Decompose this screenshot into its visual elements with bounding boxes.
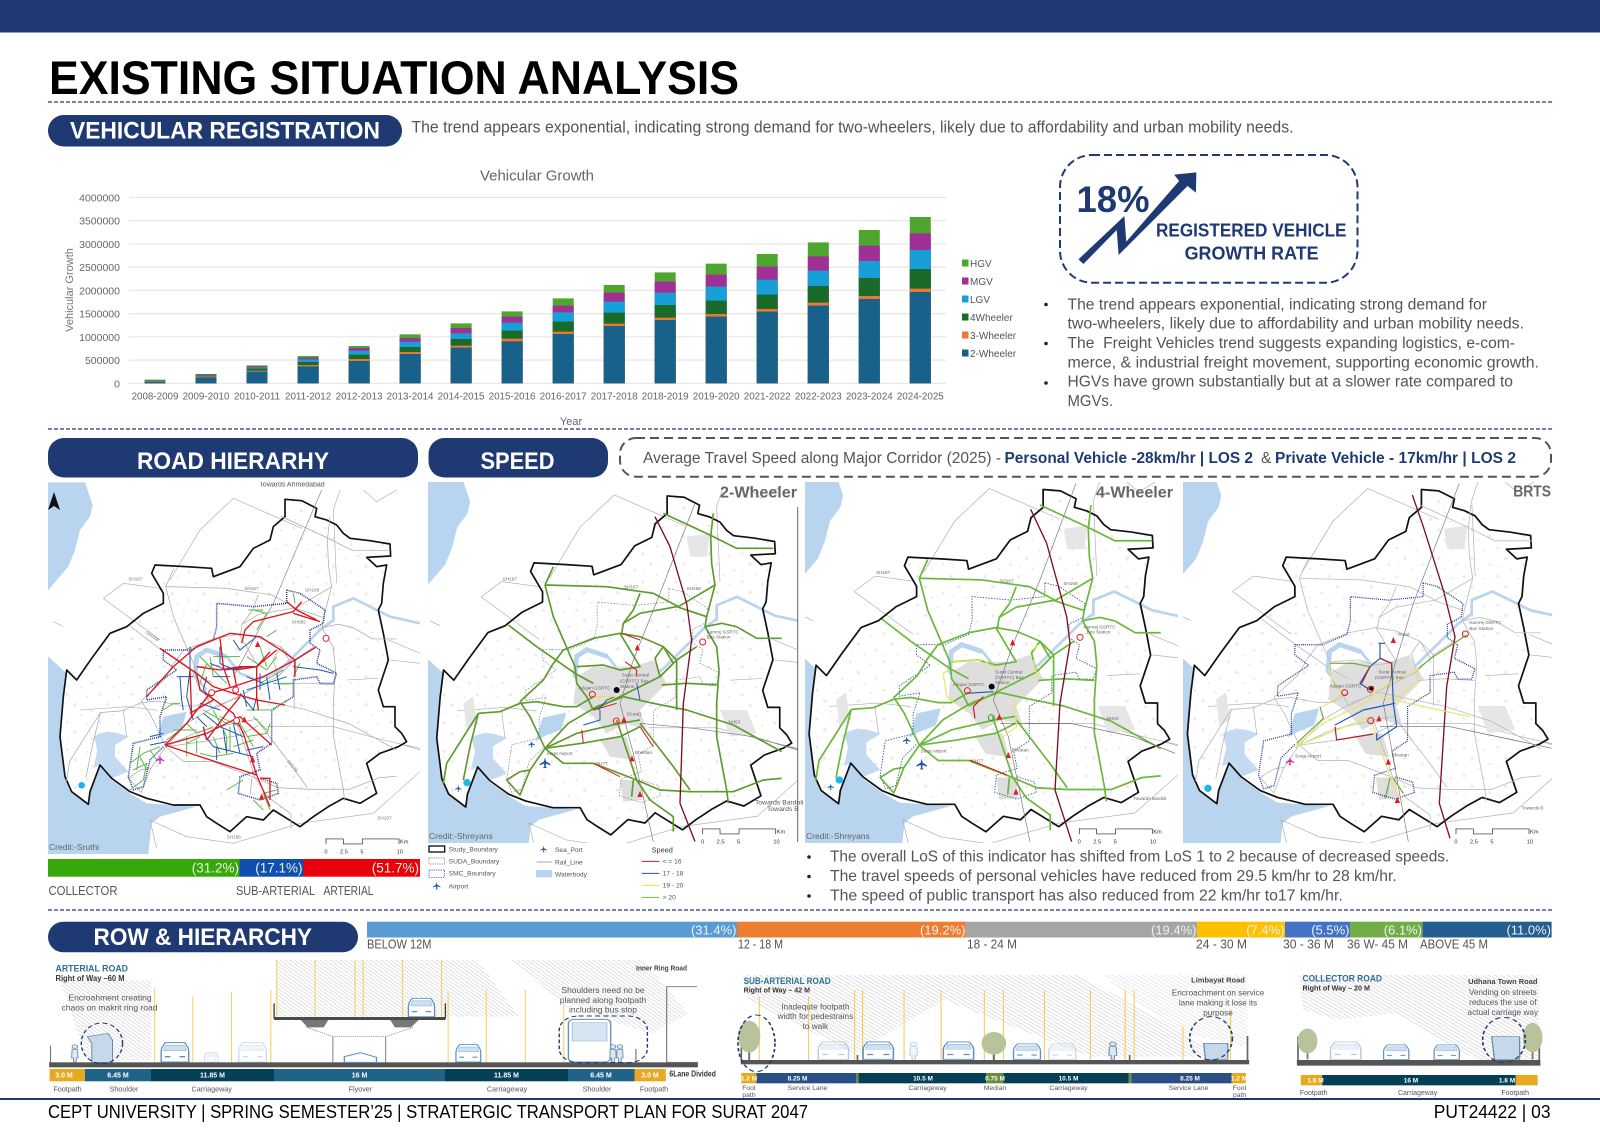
x axis labels: 2016-2017 — [540, 392, 587, 403]
bar: right of way shares: (19.2%) — [920, 922, 966, 938]
scale bar — [701, 828, 785, 846]
bar labels: right of way widths — [367, 938, 1488, 952]
bullet list: vehicle trends: two-wheelers, likely due to affordability and urban mobility needs. — [1068, 316, 1524, 333]
station labels: Surat Airport — [1295, 753, 1322, 758]
road and station labels — [503, 577, 741, 766]
chart legend: LGV — [970, 295, 990, 306]
bar labels: road class: SUB-ARTERIAL — [236, 884, 315, 898]
width labels: path — [1233, 1092, 1246, 1099]
width bar — [1301, 1075, 1538, 1085]
top banner — [0, 0, 1600, 32]
map label: 2-wheeler: 2-Wheeler — [720, 485, 797, 502]
road and station labels: SH77 — [972, 759, 984, 764]
credit: Credit:-Shreyans — [429, 831, 493, 841]
width labels: Carriageway — [192, 1085, 232, 1094]
road and station labels: Bhestan — [1012, 748, 1029, 753]
scale bar: 2.5 — [1470, 840, 1478, 846]
scale bar: 10 — [1527, 840, 1533, 846]
width values: 10.5 M — [1059, 1076, 1078, 1082]
width values: 0.75 M — [985, 1076, 1005, 1082]
scale bar: 0 — [701, 840, 704, 846]
bar: right of way shares: (5.5%) — [1311, 922, 1350, 938]
x axis labels: 2015-2016 — [489, 392, 536, 403]
heading: speed: SPEED — [480, 448, 554, 475]
road and station labels: SH167 — [503, 577, 517, 582]
cross section: sub-arterial road — [738, 975, 1265, 1099]
scale bar: 0 — [1078, 840, 1081, 846]
map markers — [78, 635, 329, 800]
callout: 18% growth rate — [1060, 155, 1358, 283]
legend: map symbols: 19 - 20 — [663, 883, 684, 890]
chart legend: 4Wheeler — [970, 313, 1013, 324]
section titles: ARTERIAL ROAD — [56, 964, 128, 975]
right of way: Right of Way – 20 M — [1302, 984, 1370, 993]
bullet list: vehicle trends: The trend appears exponential, indicating strong demand for — [1068, 296, 1487, 313]
map label: BRTS: BRTS — [1513, 484, 1551, 501]
road and station labels: (GSRTC) Bus — [995, 675, 1024, 680]
x axis labels: 2010-2011 — [234, 392, 280, 403]
x axis labels: 2012-2013 — [336, 392, 383, 403]
width bar: 11.85 M — [494, 1072, 519, 1080]
chart legend: 3-Wheeler — [970, 331, 1017, 342]
y axis labels: 3500000 — [79, 216, 120, 228]
annotations: width for pedestrains — [777, 1012, 853, 1021]
scale bar: 10 — [1150, 840, 1156, 846]
map: 2-wheeler speed — [428, 482, 798, 843]
road and station labels: Bus Station — [1087, 629, 1111, 634]
road labels: SH176 — [286, 759, 299, 774]
width bar — [741, 1073, 1246, 1083]
station labels: Bus Station — [1469, 626, 1494, 631]
road and station labels: (GSRTC) Bus — [620, 678, 649, 683]
x axis labels: 2008-2009 — [132, 392, 178, 403]
section drawing — [1297, 975, 1542, 1085]
station labels: (GSRTC) Bus — [1375, 675, 1404, 680]
heading: road hierarchy: ROAD HIERARHY — [137, 448, 329, 475]
callout: average travel speed: & — [1261, 450, 1272, 467]
y axis labels — [79, 192, 120, 390]
road labels: SH167 — [244, 586, 259, 591]
scale bar: 0 — [1454, 840, 1457, 846]
legend: map symbols: Speed — [652, 846, 673, 855]
y axis labels: 0 — [114, 378, 120, 390]
annotations — [777, 989, 1265, 1031]
scale bar: Km — [1153, 830, 1162, 836]
width values: 1.8 M — [1307, 1078, 1324, 1084]
y axis labels: 500000 — [85, 355, 120, 367]
x axis labels — [132, 392, 944, 403]
callout: average travel speed: Private Vehicle - 17km/hr | LOS 2 — [1275, 450, 1516, 467]
legend: map symbols: Airport — [449, 883, 468, 890]
road name: Inner Ring Road — [636, 964, 687, 973]
width values — [1307, 1078, 1515, 1084]
bar labels: right of way widths: 24 - 30 M — [1196, 938, 1247, 952]
bar labels: road class — [48, 884, 374, 898]
width labels: path — [742, 1092, 756, 1099]
bullet list: vehicle trends: MGVs. — [1068, 393, 1113, 410]
width labels: Shoulder — [583, 1085, 612, 1094]
road and station labels: Surat Airport — [547, 751, 573, 756]
annotations: to walk — [803, 1022, 829, 1031]
footer: course line: CEPT UNIVERSITY | SPRING SEMESTER’25 | STRATERGIC TRANSPORT PLAN FOR SURAT 2047 — [48, 1101, 808, 1122]
section drawing — [49, 960, 698, 1067]
station labels: Road — [1398, 632, 1410, 637]
width labels: Carriageway — [1398, 1090, 1438, 1097]
road labels: SH186 — [227, 835, 241, 840]
y axis title: Vehicular Growth — [64, 248, 76, 332]
width values: 1.8 M — [1499, 1078, 1515, 1084]
bar: road hierarchy shares — [48, 859, 420, 877]
encroachment highlight — [1483, 1017, 1525, 1063]
annotations: Encroachment on service — [1172, 989, 1265, 998]
scale bar: 2.5 — [717, 840, 725, 846]
bullet list: speed findings: The travel speeds of personal vehicles have reduced from 29.5 km/hr to 28 km/hr. — [830, 868, 1397, 885]
map markers — [455, 639, 706, 797]
scale bar: 10 — [397, 850, 403, 856]
legend: map symbols: Sea_Port — [555, 847, 583, 854]
annotations — [62, 985, 647, 1015]
bar labels: right of way widths: 30 - 36 M — [1283, 938, 1334, 952]
road and station labels: Bhestan — [635, 750, 652, 755]
destination labels — [755, 800, 804, 813]
callout: average travel speed — [620, 438, 1551, 477]
icon: north arrow — [48, 492, 60, 510]
road and station labels: SH167 — [624, 584, 639, 589]
annotations: Shoulders need no be — [561, 985, 645, 995]
bar: road hierarchy shares: (51.7%) — [372, 860, 419, 876]
annotations — [1468, 988, 1539, 1017]
width values: 10.5 M — [913, 1076, 933, 1082]
bar: right of way shares — [367, 922, 1552, 938]
width bar: 6.45 M — [590, 1072, 612, 1080]
width values: 1.2 M — [741, 1076, 757, 1082]
legend: map symbols: Study_Boundary — [449, 847, 499, 854]
y axis labels: 2500000 — [79, 262, 120, 274]
x axis labels: 2014-2015 — [438, 392, 485, 403]
annotations: chaos on makrit ring road — [62, 1002, 158, 1012]
x axis labels: 2011-2012 — [285, 392, 331, 403]
bullet list: speed findings: The speed of public transport has also reduced from 22 km/hr to17 km/hr. — [830, 887, 1343, 904]
chart legend: MGV — [970, 277, 993, 288]
y axis labels: 4000000 — [79, 192, 120, 204]
width labels: Carriageway — [487, 1085, 528, 1094]
station labels: Surat Central — [1378, 669, 1406, 674]
annotations: reduces the use of — [1469, 998, 1537, 1007]
width values: 1.2 M — [1231, 1076, 1247, 1082]
x axis labels: 2024-2025 — [897, 392, 944, 403]
station labels: Kamrej GSRTC — [1469, 620, 1502, 625]
road and station labels: Surat Airport — [921, 748, 947, 753]
scale bar: 5 — [737, 840, 740, 846]
scale bar: 5 — [1490, 840, 1493, 846]
icon: rising arrow — [1078, 172, 1196, 264]
map markers — [1204, 631, 1468, 803]
width labels: Flyover — [349, 1085, 373, 1094]
road and station labels: SH77 — [596, 761, 608, 766]
heading: road hierarchy — [48, 438, 418, 478]
annotations: actual carriage way — [1468, 1008, 1539, 1017]
road labels: SH168 — [305, 588, 320, 593]
bar labels: right of way widths: 12 - 18 M — [738, 938, 783, 952]
road labels: SH602 — [292, 619, 306, 624]
scale bar: 10 — [773, 840, 780, 846]
right of way: Right of Way –60 M — [56, 974, 125, 983]
road and station labels: Kamrej GSRTC — [707, 629, 740, 634]
road and station labels: Station — [995, 680, 1010, 685]
width labels: Foot — [742, 1085, 756, 1092]
legend: map symbols: Rail_Line — [555, 859, 583, 866]
width bar: 6.45 M — [107, 1072, 129, 1080]
road and station labels: Adajan GSRTC — [953, 682, 985, 687]
scale bar: Km — [400, 840, 409, 846]
bar: right of way shares: (19.4%) — [1151, 922, 1196, 938]
heading: vehicular registration: VEHICULAR REGISTRATION — [70, 118, 380, 144]
section drawing — [738, 975, 1249, 1083]
road labels: SH168 — [145, 630, 160, 643]
annotations: Encroahment creating — [68, 992, 152, 1002]
width bar — [50, 1069, 666, 1081]
width labels: Carriageway — [909, 1085, 947, 1092]
encroachment highlights — [738, 1015, 1232, 1072]
destination labels: Towards B — [767, 806, 799, 813]
width bar: 16 M — [352, 1072, 367, 1080]
legend: map symbols: SUDA_Boundary — [449, 859, 500, 866]
road and station labels: Towards Bardoli — [1133, 796, 1166, 801]
x axis labels: 2017-2018 — [591, 392, 638, 403]
legend: map symbols: < = 16 — [663, 859, 682, 866]
width values: 8.25 M — [1180, 1076, 1200, 1082]
bar chart: vehicular growth — [64, 168, 1017, 428]
bar labels: right of way widths: 36 W- 45 M — [1347, 938, 1408, 952]
road and station labels: Adajan GSRTC — [578, 685, 611, 690]
road labels: SH107 — [377, 815, 392, 820]
bar labels: right of way widths: 18 - 24 M — [967, 938, 1017, 952]
annotations: planned along footpath — [560, 995, 647, 1005]
road and station labels — [876, 570, 1166, 801]
road and station labels: Surat Central — [995, 669, 1022, 674]
width bar: 11.85 M — [200, 1072, 225, 1080]
chart legend — [962, 259, 1017, 360]
road name: Udhana Town Road — [1468, 977, 1538, 986]
map: 4-wheeler speed — [805, 482, 1178, 843]
annotations: lane making it lose its — [1179, 998, 1257, 1007]
road and station labels: Kamrej GSRTC — [1083, 624, 1116, 629]
bar labels: right of way widths: BELOW 12M — [367, 938, 432, 952]
x axis labels: 2018-2019 — [642, 392, 689, 403]
bar labels: road class: ARTERIAL — [324, 884, 374, 898]
road and station labels: NH53 — [728, 719, 741, 724]
width values: 16 M — [1404, 1078, 1418, 1084]
bullet list: vehicle trends: merce, & industrial freight movement, supporting economic growth. — [1068, 355, 1539, 372]
road labels — [128, 577, 392, 840]
heading: row and hierarchy — [48, 922, 358, 952]
bullet list: speed findings: The overall LoS of this indicator has shifted from LoS 1 to 2 because of decreased speeds. — [830, 849, 1449, 866]
bar: road hierarchy shares: (31.2%) — [192, 860, 239, 876]
cross section: arterial road — [49, 960, 716, 1094]
station labels — [1295, 620, 1543, 810]
bar: right of way shares: (31.4%) — [691, 922, 736, 938]
x axis labels: 2013-2014 — [387, 392, 434, 403]
road and station labels: Station — [620, 684, 635, 689]
width labels: Service Lane — [1169, 1085, 1209, 1092]
station labels: Towards B — [1522, 805, 1543, 810]
width labels: Shoulder — [110, 1085, 139, 1094]
bullet list: vehicle trends: HGVs have grown substantially but at a slower rate compared to — [1068, 374, 1513, 391]
scale bar: 2.5 — [340, 850, 348, 856]
road and station labels: SH168 — [1063, 581, 1078, 586]
bullet list: vehicle trends — [1044, 296, 1539, 410]
legend: map symbols: Waterbody — [555, 872, 588, 879]
scale bar: 5 — [1114, 840, 1117, 846]
stat caption: GROWTH RATE — [1185, 242, 1319, 263]
station labels: Bhestan — [1392, 753, 1409, 758]
width bar: 3.0 M — [55, 1072, 73, 1080]
footer: page code: PUT24422 | 03 — [1434, 1101, 1550, 1122]
callout: average travel speed: Average Travel Speed along Major Corridor (2025) - — [643, 450, 1001, 467]
credit: Credit:-Sruthi — [49, 842, 99, 852]
flyover — [274, 1003, 445, 1062]
width values: 8.25 M — [788, 1076, 807, 1082]
scale bar: 5 — [360, 850, 363, 856]
width labels — [742, 1085, 1247, 1099]
width labels: Footpath — [640, 1085, 668, 1094]
x axis title: Year — [560, 416, 582, 428]
road and station labels: SH167 — [876, 570, 891, 575]
width labels: Foot — [1233, 1085, 1247, 1092]
road and station labels: (Surat) — [627, 712, 641, 717]
scale bar: Km — [1530, 830, 1539, 836]
bar labels: road class: COLLECTOR — [48, 884, 118, 898]
lane note: 6Lane Divided — [669, 1070, 716, 1079]
width labels: Median — [984, 1085, 1006, 1092]
right of way: Right of Way – 42 M — [744, 986, 810, 995]
scale bar: Km — [777, 830, 785, 836]
y axis labels: 1500000 — [79, 309, 120, 321]
section title: COLLECTOR ROAD — [1302, 974, 1382, 985]
width labels: Footpath — [1501, 1090, 1529, 1097]
scale bar — [324, 838, 408, 854]
footer rule — [0, 1098, 1600, 1100]
width labels — [1300, 1090, 1529, 1097]
heading: row and hierarchy: ROW & HIERARCHY — [94, 924, 312, 951]
x axis labels: 2021-2022 — [744, 392, 791, 403]
width labels: Footpath — [1300, 1090, 1328, 1097]
map: BRTS speed — [1183, 482, 1552, 843]
annotations: Inadequte footpath — [781, 1002, 850, 1011]
stacked bars — [144, 217, 931, 383]
legend: map symbols: SMC_Boundary — [449, 871, 496, 878]
legend: map symbols: > 20 — [663, 895, 676, 902]
x axis labels: 2022-2023 — [795, 392, 842, 403]
annotations: purpose — [1203, 1008, 1233, 1017]
width values — [741, 1076, 1247, 1082]
heading: speed — [428, 438, 608, 478]
callout: average travel speed: Personal Vehicle -28km/hr | LOS 2 — [1004, 450, 1253, 467]
road labels: SH167 — [128, 577, 143, 582]
label: towards Ahmedabad: Towards Ahmedabad — [259, 482, 325, 488]
bar: right of way shares: (11.0%) — [1506, 922, 1551, 938]
chart title: Vehicular Growth — [480, 168, 594, 184]
legend: map symbols: 17 - 18 — [663, 871, 684, 878]
x axis labels: 2019-2020 — [693, 392, 740, 403]
map label: 4-wheeler: 4-Wheeler — [1096, 485, 1173, 502]
chart legend: 2-Wheeler — [970, 349, 1017, 360]
section title: SUB-ARTERIAL ROAD — [744, 976, 831, 987]
width labels: Service Lane — [788, 1085, 828, 1092]
width labels: Carriageway — [1049, 1085, 1088, 1092]
width labels: Footpath — [53, 1085, 82, 1094]
legend: map symbols — [429, 846, 684, 902]
destination labels: Towards Bardoli — [755, 800, 804, 806]
y axis labels: 3000000 — [79, 239, 120, 251]
road and station labels: Surat Central — [622, 673, 649, 678]
stat: 18%: 18% — [1076, 179, 1150, 220]
road and station labels: SH167 — [999, 579, 1014, 584]
bullet list: vehicle trends: The Freight Vehicles trend suggests expanding logistics, e-com- — [1068, 335, 1515, 352]
road and station labels: NH53 — [1107, 716, 1119, 721]
annotations: including bus stop — [569, 1005, 637, 1015]
bar: right of way shares: (7.4%) — [1246, 922, 1284, 938]
map markers — [827, 634, 1083, 795]
annotations: Vending on streets — [1469, 988, 1537, 997]
station labels: Adajan GSRTC — [1329, 683, 1362, 688]
bullet list: speed findings — [807, 849, 1449, 904]
chart legend: HGV — [970, 259, 992, 270]
encroachment highlights — [81, 1016, 647, 1064]
scale bar: 0 — [324, 850, 327, 856]
bar: road hierarchy shares: (17.1%) — [255, 860, 302, 876]
bar: right of way shares: (6.1%) — [1384, 922, 1422, 938]
title: EXISTING SITUATION ANALYSIS — [49, 51, 739, 104]
road and station labels: Bus Station — [707, 634, 731, 639]
scale bar — [1454, 828, 1539, 846]
y axis labels: 1000000 — [79, 332, 120, 344]
bar labels: right of way widths: ABOVE 45 M — [1420, 938, 1488, 952]
x axis labels: 2023-2024 — [846, 392, 893, 403]
scale bar — [1078, 828, 1162, 846]
intro sentence: The trend appears exponential, indicating strong demand for two-wheelers, likely due to affordability and urban mobility needs. — [412, 118, 1294, 136]
width bar: 3.0 M — [641, 1072, 659, 1080]
y axis labels: 2000000 — [79, 285, 120, 297]
cross section: collector road — [1297, 974, 1542, 1097]
stat caption — [1156, 220, 1346, 263]
width labels — [53, 1085, 668, 1094]
credit: Credit:-Shreyans — [806, 831, 870, 841]
road name: Limbayat Road — [1191, 976, 1245, 985]
x axis labels: 2009-2010 — [183, 392, 230, 403]
stat caption: REGISTERED VEHICLE — [1156, 220, 1346, 240]
map: road hierarchy — [33, 482, 420, 856]
scale bar: 2.5 — [1093, 840, 1101, 846]
road and station labels: SH168 — [687, 586, 701, 591]
